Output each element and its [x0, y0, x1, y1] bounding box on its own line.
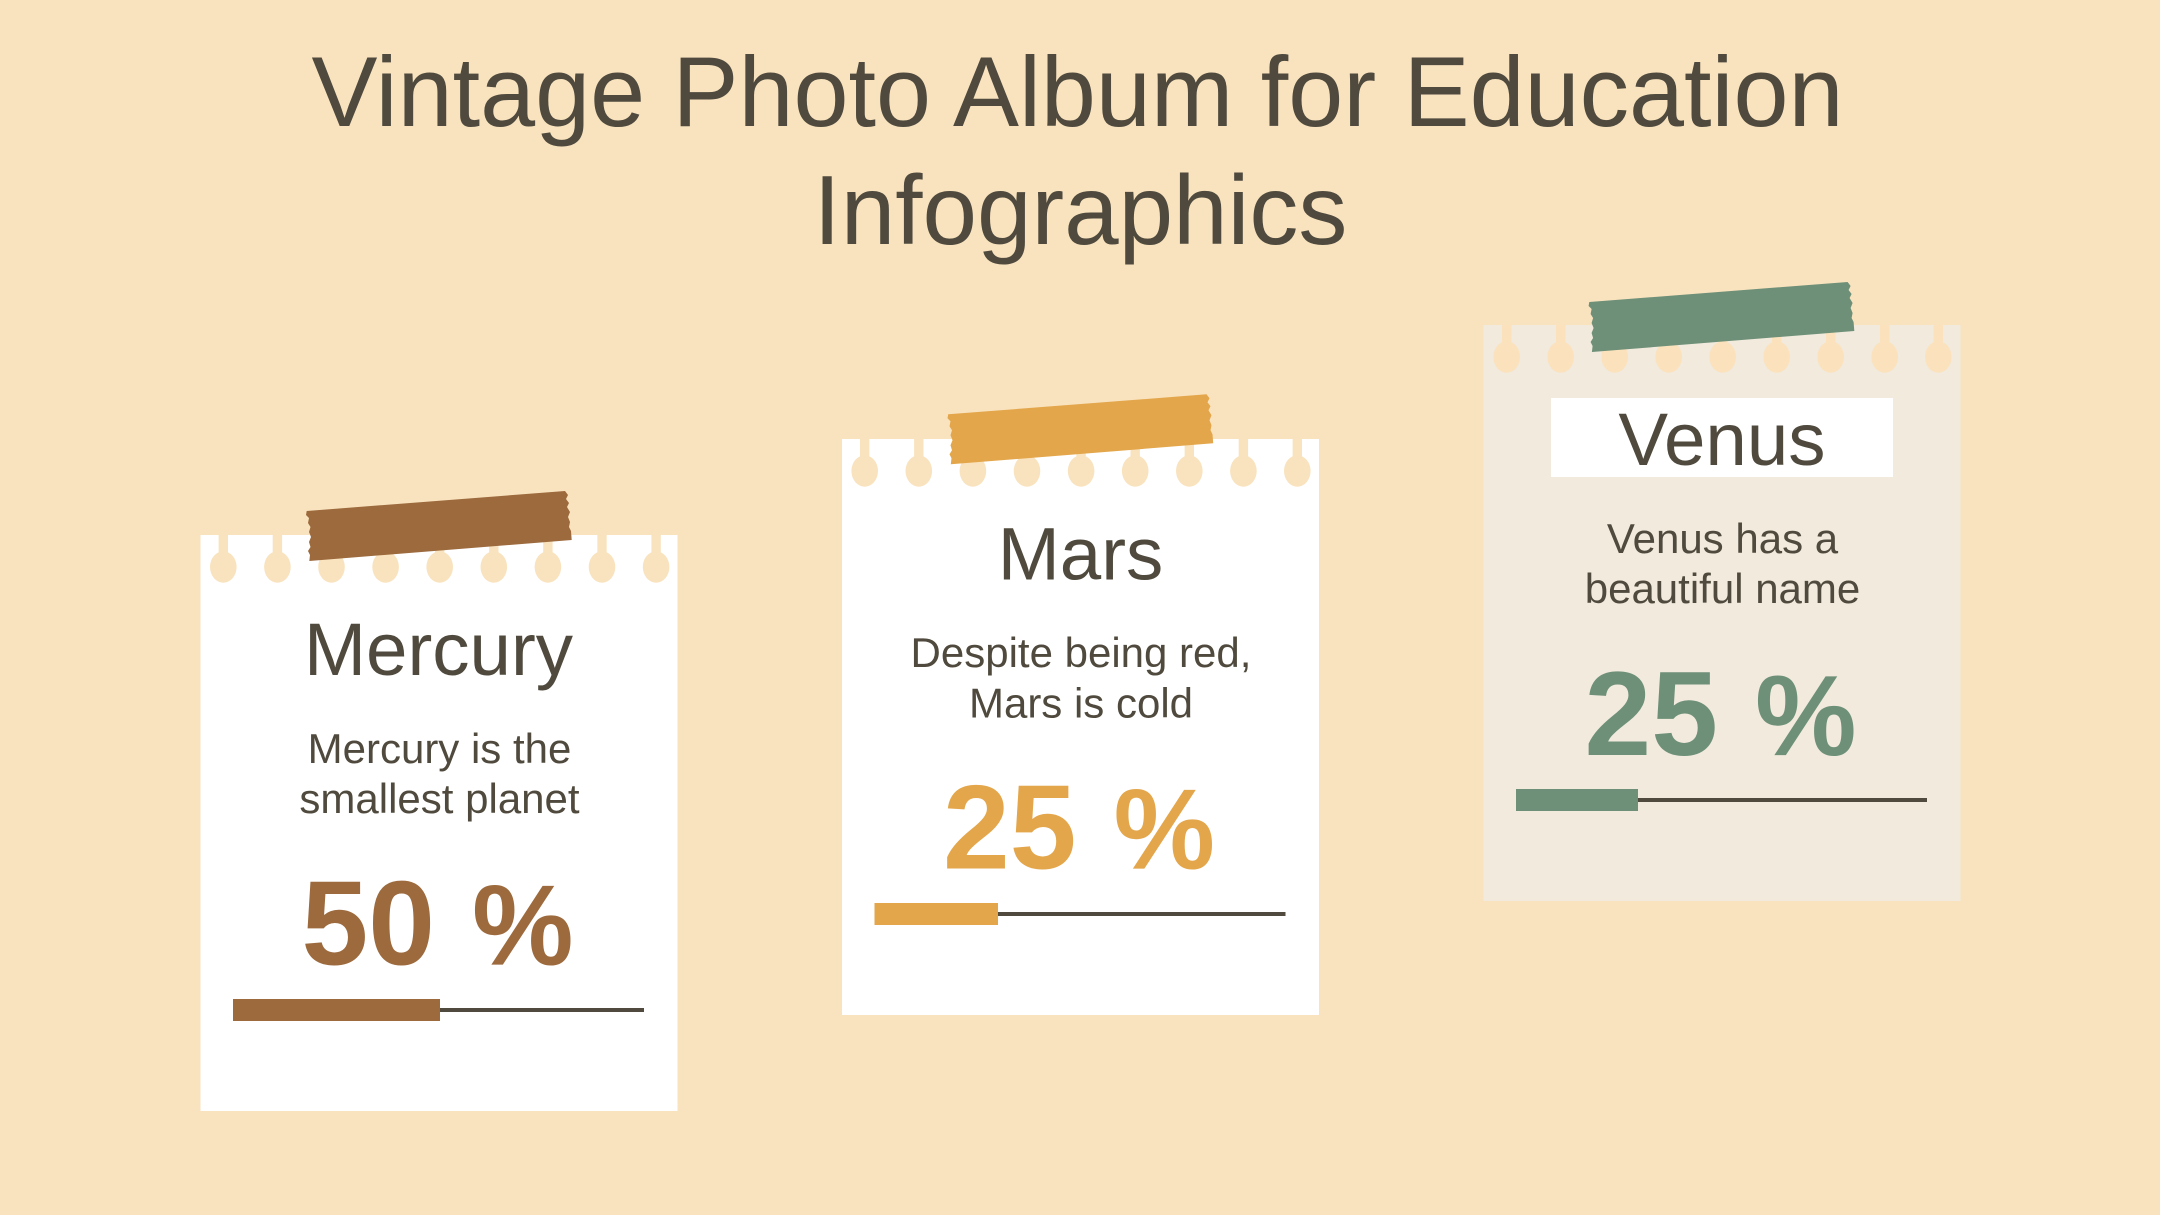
panel: Mercury [200, 491, 678, 1111]
Venus punched holes [1493, 325, 1952, 373]
Mars heading: Mars [998, 512, 1163, 596]
Mars punched holes [851, 439, 1311, 487]
Venus progress bar [1516, 789, 1927, 811]
Mercury heading: Mercury [304, 608, 574, 691]
Venus note paper [1484, 325, 1960, 901]
Mars description: Mars is cold [969, 680, 1193, 726]
title: Vintage Photo Album for Education [311, 36, 1844, 147]
Mars description: Despite being red, [911, 629, 1251, 676]
Venus tape [1589, 282, 1854, 352]
Venus description: beautiful name [1585, 565, 1860, 612]
panel: Venus [1484, 282, 1960, 901]
Venus heading box [1551, 398, 1893, 477]
Mars percentage: 25 % [943, 760, 1215, 894]
Mercury note paper [200, 535, 678, 1111]
Mercury description: smallest planet [299, 775, 580, 822]
Mars note paper [842, 439, 1319, 1015]
Venus description: Venus has a [1607, 515, 1839, 562]
Venus description [1585, 515, 1860, 612]
Venus percentage: 25 % [1584, 647, 1856, 781]
Mars description [911, 629, 1251, 726]
Mercury description: Mercury is the [308, 725, 571, 772]
Mars progress bar [874, 903, 1286, 925]
Mercury progress bar [233, 999, 644, 1021]
Venus heading: Venus [1618, 398, 1826, 481]
Mercury tape [306, 491, 572, 561]
Mars tape [948, 394, 1213, 464]
title: Infographics [814, 155, 1347, 265]
Mercury percentage: 50 % [302, 856, 574, 990]
title [311, 36, 1844, 265]
Mercury punched holes [210, 535, 669, 583]
Mercury description [299, 725, 580, 822]
panel: Mars [842, 394, 1319, 1015]
